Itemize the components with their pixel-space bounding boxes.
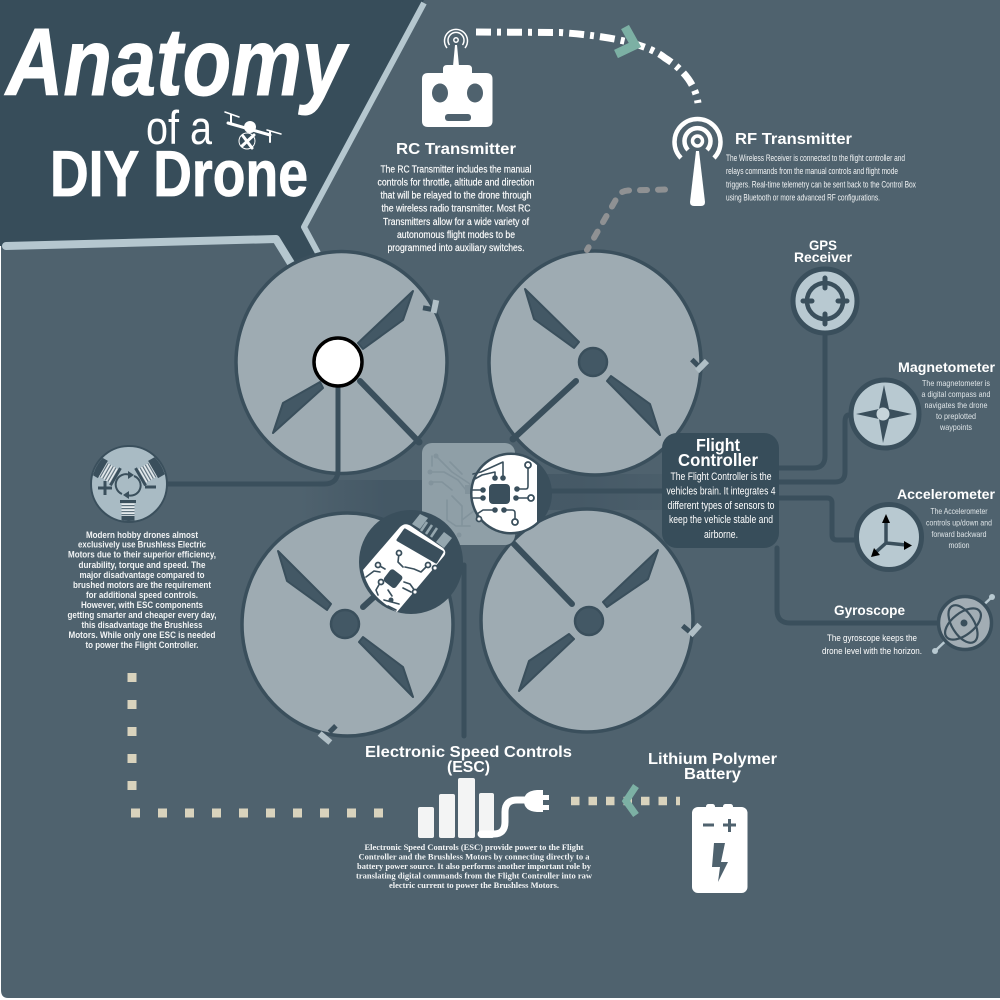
text: brushless motors: for additional speed controls. (86, 590, 198, 600)
text: RC transmitter: The RC Transmitter includes the manual (380, 164, 532, 176)
wire: brushless motor to hub (167, 388, 338, 484)
coil upper right (134, 457, 165, 486)
text: brushless motors: Motors. While only one ESC is needed (68, 630, 216, 640)
text: brushless motors: However, with ESC components (81, 600, 203, 610)
text: RF transmitter: relays commands from the manual controls and flight mode (726, 166, 898, 176)
sensor: GPS receiver (793, 237, 857, 333)
text: brushless motors (68, 530, 216, 650)
heading: lithium polymer battery: Battery (684, 766, 741, 783)
sensor: accelerometer: Accelerometer (897, 486, 996, 502)
panel: flight controller: different types of sensors to (668, 500, 774, 512)
panel: flight controller (662, 433, 779, 548)
text: ESC description: battery power source. It also performs another important role by (357, 861, 592, 871)
text: ESC description: electric current to power the Brushless Motors. (389, 880, 559, 890)
sensor: GPS receiver: GPS (809, 237, 837, 253)
sensor: accelerometer: The Accelerometer (930, 506, 988, 516)
rotor: top right (489, 251, 709, 475)
title: Anatomy: Anatomy (4, 9, 350, 116)
title: DIY Drone: DIY Drone (50, 137, 308, 210)
text: brushless motors: to power the Flight Controller. (86, 640, 198, 650)
title panel (0, 0, 424, 265)
text: brushless motors: major disadvantage compared to (80, 570, 205, 580)
icon: small drone (225, 112, 281, 149)
central airframe plate (422, 443, 515, 545)
text: ESC description: translating digital commands from the Flight Controller into raw (356, 870, 593, 880)
coil bottom (120, 500, 136, 521)
text: brushless motors: exclusively use Brushless Electric (78, 540, 206, 550)
rotation arrows (116, 471, 141, 499)
sensor: gyroscope (822, 594, 995, 657)
wire: accelerometer to flight controller (778, 498, 856, 540)
text: RF transmitter: using Bluetooth or more advanced RF configurations. (726, 192, 880, 202)
text: ESC description: Electronic Speed Controls (ESC) provide power to the Flight (364, 842, 584, 852)
sensor: gyroscope: The gyroscope keeps the (827, 633, 917, 644)
sensor: magnetometer: navigates the drone (924, 400, 988, 410)
text: RC transmitter: Transmitters allow for a wide variety of (383, 217, 529, 228)
sensor: accelerometer: motion (948, 540, 970, 550)
body band right of centre (540, 474, 665, 510)
title: of a: of a (146, 101, 213, 154)
wire: flight controller to plate (548, 488, 665, 494)
ESC board (359, 510, 463, 614)
heading: lithium polymer battery (648, 751, 777, 783)
text: ESC description (356, 842, 593, 890)
text: RF transmitter: The Wireless Receiver is connected to the flight controller and (726, 153, 905, 163)
rotor: bottom left (242, 513, 453, 745)
heading: electronic speed controls: Electronic Speed Controls (365, 744, 572, 761)
icon: ESC bars and plug (418, 778, 549, 838)
sensor: magnetometer: Magnetometer (898, 359, 996, 375)
text: brushless motors: Modern hobby drones almost (86, 530, 198, 540)
sensor: accelerometer: forward backward (932, 529, 987, 539)
panel: flight controller: Controller (678, 450, 758, 470)
text: RC transmitter (378, 141, 534, 254)
minus sign (145, 486, 156, 488)
text: RC transmitter: RC Transmitter (396, 141, 516, 158)
dashed link: ESC vertical (128, 673, 136, 790)
rotor: bottom right (481, 509, 702, 732)
text: RF transmitter: RF Transmitter (735, 131, 852, 148)
panel: flight controller: vehicles brain. It integrates 4 (666, 486, 776, 498)
text: RC transmitter: autonomous flight modes to be (397, 230, 515, 241)
arrow: RF transmitter to drone (587, 190, 665, 250)
body band left of centre (300, 480, 425, 518)
wire: magnetometer to flight controller (778, 415, 848, 482)
plus sign (98, 481, 112, 495)
text: brushless motors: Motors due to their superior efficiency, (68, 550, 216, 560)
hub: top left motor (314, 338, 362, 386)
motor coils (93, 457, 165, 521)
text: ESC description: Controller and the Brushless Motors by connecting directly to a (358, 852, 590, 862)
sensor: gyroscope: Gyroscope (834, 602, 905, 618)
wire: ESC downward (462, 565, 466, 736)
sensor: magnetometer: to preplotted (936, 411, 976, 421)
text: RF transmitter (726, 131, 916, 202)
coil upper left (93, 458, 122, 486)
wire: GPS to flight controller (778, 335, 825, 468)
sensor: gyroscope: drone level with the horizon. (822, 646, 922, 657)
text: brushless motors: this disadvantage the Brushless (82, 620, 202, 630)
text: RC transmitter: that will be relayed to the drone through (380, 190, 532, 202)
sensor: magnetometer: waypoints (939, 422, 972, 432)
sensor: accelerometer (856, 486, 996, 570)
heading: electronic speed controls (365, 744, 572, 776)
rotor: top left (236, 252, 447, 474)
flight controller board (470, 452, 552, 534)
text: RC transmitter: the wireless radio transmitter. Most RC (382, 204, 530, 214)
sensor: magnetometer (851, 359, 996, 448)
panel: flight controller: The Flight Controller is the (670, 471, 772, 483)
icon: RF transmitter (675, 119, 720, 206)
dashed link: ESC horizontal (131, 808, 383, 818)
sensor: magnetometer: The magnetometer is (922, 378, 990, 388)
wire: gyroscope to flight controller (777, 548, 940, 623)
sensor: GPS receiver: Receiver (794, 249, 853, 265)
icon: RC transmitter (422, 29, 492, 127)
heading: electronic speed controls: (ESC) (447, 759, 490, 776)
text: brushless motors: brushed motors are the requirement (73, 580, 211, 590)
panel: flight controller: airborne. (704, 529, 738, 541)
text: RF transmitter: triggers. Real-time telemetry can be sent back to the Control Box (726, 180, 916, 190)
panel: flight controller: keep the vehicle stable and (669, 514, 773, 526)
dashed link: battery to ESC (571, 786, 680, 815)
heading: lithium polymer battery: Lithium Polymer (648, 751, 777, 768)
panel: flight controller: Flight (696, 435, 740, 455)
text: brushless motors: getting smarter and cheaper every day, (68, 610, 216, 620)
text: brushless motors: durability, torque and speed. The (78, 560, 206, 570)
text: RC transmitter: controls for throttle, altitude and direction (378, 178, 534, 188)
brushless motor icon (88, 446, 168, 524)
text: RC transmitter: programmed into auxiliary switches. (388, 243, 524, 254)
icon: battery (692, 804, 748, 893)
arrow: RC transmitter to RF transmitter (476, 27, 698, 103)
